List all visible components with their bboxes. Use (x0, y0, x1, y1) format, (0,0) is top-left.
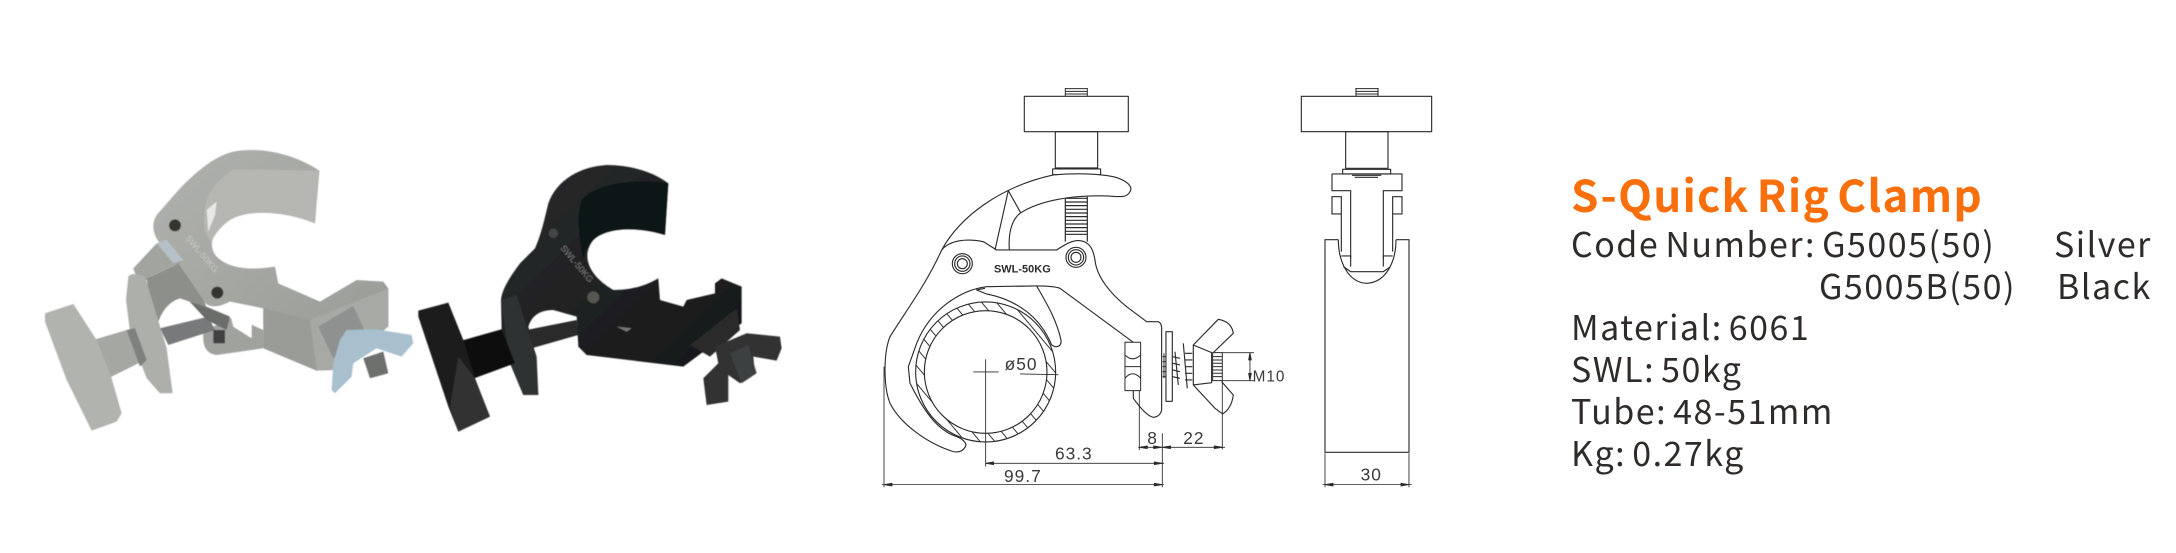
washer (318, 306, 365, 358)
upper lever outline (942, 174, 1131, 250)
title: S-Quick Rig Clamp (1571, 161, 1983, 225)
plate label: SWL-50KG (994, 263, 1051, 275)
material: Material: 6061 (1571, 301, 1810, 350)
wing nut (703, 333, 782, 405)
dimension labels: 63.3 (1055, 443, 1093, 463)
lower body (1325, 240, 1409, 452)
code number black: G5005B(50) (1819, 260, 2016, 309)
black label: Black (2057, 260, 2152, 309)
window under plate (230, 307, 252, 338)
threaded rod (160, 317, 215, 345)
lever (501, 295, 538, 395)
lower pad (203, 317, 263, 355)
lever (126, 274, 173, 393)
dimension labels: 8 (1147, 428, 1158, 448)
pivot bolts (952, 247, 1086, 274)
threaded rod (1065, 197, 1087, 242)
wing nut (1193, 319, 1233, 414)
hex nut (1125, 342, 1141, 391)
dimension labels: M10 (1253, 369, 1285, 386)
hook plate (885, 240, 1162, 452)
yoke (1332, 174, 1402, 258)
threaded rod (527, 320, 578, 348)
code number silver: Code Number: G5005(50) (1571, 218, 1995, 267)
dimension labels: ø50 (1005, 354, 1038, 374)
technical drawing: side view (1301, 88, 1432, 487)
washer (690, 308, 740, 357)
width dimension: 30 (1361, 465, 1382, 485)
knob and stem (1024, 88, 1128, 175)
technical drawing: front view with dimensions (882, 88, 1285, 487)
dimension labels: 99.7 (1004, 466, 1042, 486)
photo: black clamp (418, 165, 782, 432)
inner jaw (977, 286, 1061, 347)
bolt end (730, 345, 757, 383)
weight: Kg: 0.27kg (1571, 427, 1745, 476)
rear arm (133, 243, 182, 287)
knob and threads (1301, 88, 1432, 177)
washer and springs (1163, 332, 1192, 401)
bolt end (363, 352, 388, 378)
photo: black clamp: SWL-50KG (558, 243, 595, 284)
jaw and plate (153, 150, 388, 371)
T knob (418, 303, 490, 432)
dimension labels: 22 (1183, 428, 1205, 448)
safe working load: SWL: 50kg (1571, 343, 1742, 392)
centre mark and dimension lines (882, 353, 1254, 487)
wing nut (332, 329, 413, 393)
tube section (916, 302, 1056, 442)
T knob (45, 304, 122, 431)
width dimension (1323, 453, 1412, 487)
silver label: Silver (2054, 218, 2152, 267)
dimension labels (1004, 354, 1285, 486)
bolt end (1213, 353, 1222, 381)
shaft (462, 329, 515, 379)
photo: silver clamp: SWL-50KG (183, 233, 220, 274)
photo: silver clamp (45, 150, 413, 431)
jaw and body (501, 165, 742, 395)
shaft (93, 330, 142, 378)
tube size: Tube: 48-51mm (1571, 385, 1834, 434)
